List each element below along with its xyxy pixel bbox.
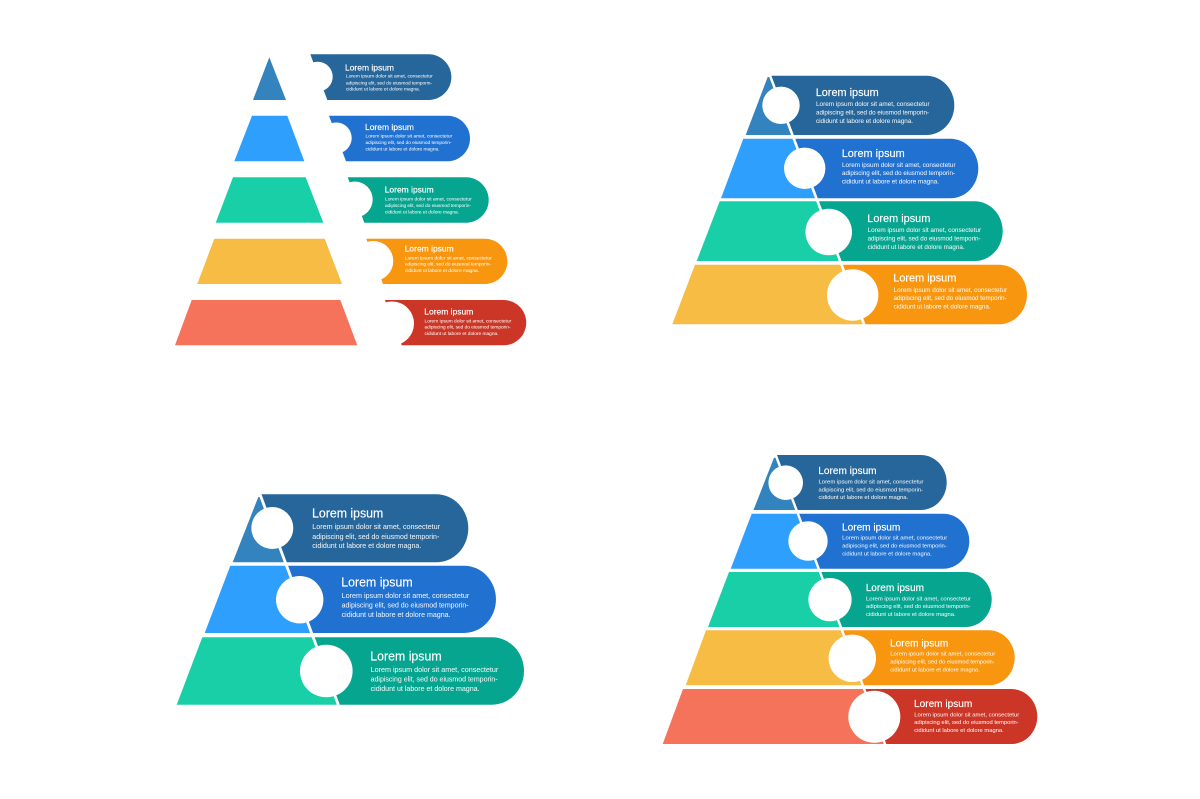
tier 3	[216, 177, 489, 223]
callout text: adipiscing elit, sed do eiusmod temporin-	[342, 600, 469, 610]
callout text	[842, 148, 956, 186]
callout text: Lorem ipsum	[893, 273, 956, 285]
icon placeholder circle	[829, 635, 876, 682]
callout text: adipiscing elit, sed do eiusmod temporin-	[914, 720, 1019, 726]
callout text: Lorem ipsum dolor sit amet, consectetur	[868, 227, 982, 234]
pyramid block	[205, 566, 310, 633]
pyramid block	[216, 177, 323, 223]
callout text	[345, 62, 433, 93]
callout text: Lorem ipsum	[405, 244, 454, 254]
callout text: cididunt ut labore et dolore magna.	[890, 667, 980, 673]
callout text: adipiscing elit, sed do eiusmod temporin-	[405, 262, 491, 268]
icon placeholder circle	[808, 578, 852, 621]
callout text: Lorem ipsum dolor sit amet, consectetur	[842, 162, 956, 169]
tier 2	[234, 116, 470, 161]
callout text: Lorem ipsum	[816, 87, 879, 99]
pyramid block	[253, 57, 286, 100]
callout text: Lorem ipsum dolor sit amet, consectetur	[424, 318, 512, 324]
callout text: Lorem ipsum dolor sit amet, consectetur	[405, 255, 492, 261]
callout text	[914, 699, 1019, 734]
callout text	[365, 122, 453, 152]
callout text	[312, 507, 441, 550]
tier 5	[663, 689, 1037, 744]
pyramid block	[697, 201, 839, 261]
tier 4	[686, 630, 1015, 685]
icon placeholder circle	[848, 691, 900, 743]
icon placeholder circle	[337, 182, 373, 218]
pyramid block	[708, 572, 840, 627]
callout text: adipiscing elit, sed do eiusmod temporin-	[366, 140, 452, 146]
icon placeholder circle	[321, 122, 352, 154]
icon placeholder circle	[788, 521, 828, 561]
callout text	[370, 649, 499, 693]
callout bar	[366, 239, 507, 284]
callout text: adipiscing elit, sed do eiusmod temporin-	[385, 203, 471, 209]
tier 2	[731, 514, 969, 569]
callout bar	[866, 689, 1037, 744]
callout text: cididunt ut labore et dolore magna.	[842, 551, 932, 557]
callout bar	[795, 139, 978, 198]
callout text: adipiscing elit, sed do eiusmod temporin-	[842, 544, 947, 550]
callout text: adipiscing elit, sed do eiusmod temporin-	[816, 110, 929, 116]
callout text: adipiscing elit, sed do eiusmod temporin-	[818, 487, 923, 493]
callout bar	[843, 630, 1015, 685]
callout text: Lorem ipsum dolor sit amet, consectetur	[816, 101, 930, 108]
callout text	[816, 87, 930, 125]
callout text: cididunt ut labore et dolore magna.	[842, 178, 939, 186]
callout text: cididunt ut labore et dolore magna.	[914, 728, 1004, 734]
callout text: Lorem ipsum dolor sit amet, consectetur	[818, 479, 924, 485]
callout text: Lorem ipsum dolor sit amet, consectetur	[342, 591, 470, 600]
icon placeholder circle	[784, 148, 825, 189]
callout bar	[777, 455, 947, 510]
callout text: Lorem ipsum	[914, 699, 972, 710]
icon placeholder circle	[251, 507, 293, 549]
callout bar	[821, 572, 992, 627]
callout bar	[348, 177, 489, 223]
callout text: cididunt ut labore et dolore magna.	[366, 146, 440, 152]
tier 3	[697, 201, 1003, 261]
callout text: cididunt ut labore et dolore magna.	[866, 612, 956, 618]
tier 4	[672, 265, 1027, 324]
callout text: Lorem ipsum dolor sit amet, consectetur	[842, 536, 947, 542]
pyramid block	[686, 630, 862, 685]
callout text: Lorem ipsum	[818, 466, 877, 477]
callout text	[893, 273, 1008, 310]
callout text: cididunt ut labore et dolore magna.	[405, 268, 479, 274]
tier 4	[197, 239, 507, 284]
pyramid block	[731, 514, 817, 569]
tier 1	[233, 494, 468, 562]
callout text: Lorem ipsum dolor sit amet, consectetur	[890, 652, 995, 658]
callout text: cididunt ut labore et dolore magna.	[818, 495, 908, 501]
callout text: Lorem ipsum	[842, 148, 905, 160]
callout text: Lorem ipsum	[867, 213, 930, 225]
icon placeholder circle	[805, 209, 852, 255]
callout text	[341, 575, 470, 619]
panel: separated five-tier pyramid (top left)	[175, 54, 526, 346]
callout text: cididunt ut labore et dolore magna.	[371, 684, 480, 693]
callout bar	[799, 514, 969, 569]
callout text	[818, 466, 924, 501]
callout text: Lorem ipsum dolor sit amet, consectetur	[385, 197, 472, 203]
icon placeholder circle	[768, 465, 803, 500]
callout text: cididunt ut labore et dolore magna.	[312, 541, 421, 550]
callout text: cididunt ut labore et dolore magna.	[894, 304, 991, 310]
callout text: adipiscing elit, sed do eiusmod temporin-	[424, 325, 511, 331]
tier 5	[175, 300, 526, 346]
callout text: Lorem ipsum dolor sit amet, consectetur	[866, 596, 971, 602]
callout text: cididunt ut labore et dolore magna.	[346, 87, 420, 93]
callout text: adipiscing elit, sed do eiusmod temporin-	[866, 604, 971, 610]
callout bar	[771, 76, 954, 135]
callout text	[405, 244, 492, 274]
callout text: Lorem ipsum dolor sit amet, consectetur	[894, 287, 1008, 294]
tier 2	[721, 139, 978, 198]
tier 3	[708, 572, 992, 627]
callout text: Lorem ipsum	[370, 649, 442, 663]
callout bar	[288, 566, 496, 633]
pyramid block	[721, 139, 815, 198]
callout text: adipiscing elit, sed do eiusmod temporin-	[868, 236, 981, 242]
callout text: Lorem ipsum dolor sit amet, consectetur	[346, 74, 433, 80]
callout bar	[843, 265, 1027, 324]
callout bar	[385, 300, 526, 345]
icon placeholder circle	[276, 576, 323, 623]
pyramid block	[672, 265, 863, 324]
callout text: Lorem ipsum dolor sit amet, consectetur	[366, 133, 453, 139]
pyramid block	[746, 77, 791, 135]
callout text: cididunt ut labore et dolore magna.	[868, 244, 965, 251]
callout text: Lorem ipsum	[842, 522, 900, 533]
tier 1	[754, 455, 947, 510]
callout text: adipiscing elit, sed do eiusmod temporin-	[890, 660, 995, 666]
callout text	[385, 185, 472, 215]
pyramid block	[175, 300, 357, 345]
callout bar	[819, 201, 1003, 261]
callout text: cididunt ut labore et dolore magna.	[385, 209, 459, 215]
icon placeholder circle	[762, 87, 800, 124]
pyramid block	[754, 458, 795, 510]
callout bar	[315, 637, 524, 705]
callout text: Lorem ipsum	[866, 583, 924, 594]
callout text: adipiscing elit, sed do eiusmod temporin-	[371, 674, 498, 684]
callout text: Lorem ipsum	[424, 307, 473, 317]
pyramid block	[177, 637, 337, 705]
tier 2	[205, 566, 496, 633]
pyramid block	[663, 689, 884, 744]
callout text: Lorem ipsum	[385, 185, 434, 195]
icon placeholder circle	[370, 302, 414, 346]
icon placeholder circle	[353, 241, 393, 281]
callout text	[842, 522, 947, 557]
callout text: Lorem ipsum	[890, 638, 948, 649]
callout text: adipiscing elit, sed do eiusmod temporin-	[346, 80, 432, 86]
callout text: cididunt ut labore et dolore magna.	[816, 118, 913, 125]
callout text: Lorem ipsum	[312, 507, 383, 521]
panel: three-tier pyramid (bottom left)	[177, 494, 524, 705]
callout bar	[262, 494, 468, 562]
callout text: Lorem ipsum dolor sit amet, consectetur	[371, 665, 499, 674]
callout text: Lorem ipsum	[341, 575, 413, 589]
callout text: adipiscing elit, sed do eiusmod temporin-	[842, 170, 955, 177]
callout text	[890, 638, 995, 673]
pyramid block	[197, 239, 342, 284]
pyramid block	[233, 497, 284, 562]
callout text: Lorem ipsum	[345, 62, 394, 72]
pyramid block	[234, 116, 304, 161]
callout text	[866, 583, 971, 618]
panel: five-tier pyramid (bottom right)	[663, 455, 1037, 744]
callout text: Lorem ipsum	[365, 122, 414, 132]
tier 1	[253, 54, 451, 100]
callout text: Lorem ipsum dolor sit amet, consectetur	[914, 712, 1019, 718]
icon placeholder circle	[300, 645, 353, 697]
tier 3	[177, 637, 524, 705]
icon placeholder circle	[827, 269, 878, 321]
callout text: adipiscing elit, sed do eiusmod temporin-	[894, 295, 1007, 302]
icon placeholder circle	[303, 62, 333, 92]
callout text: cididunt ut labore et dolore magna.	[424, 331, 498, 337]
callout text	[867, 213, 982, 251]
panel: four-tier pyramid (top right)	[672, 76, 1027, 324]
callout text: Lorem ipsum dolor sit amet, consectetur	[312, 522, 441, 531]
callout text: adipiscing elit, sed do eiusmod temporin-	[312, 532, 440, 541]
callout bar	[329, 116, 470, 161]
callout text: cididunt ut labore et dolore magna.	[342, 610, 451, 619]
tier 1	[746, 76, 954, 135]
callout bar	[310, 54, 451, 100]
callout text	[424, 307, 512, 337]
